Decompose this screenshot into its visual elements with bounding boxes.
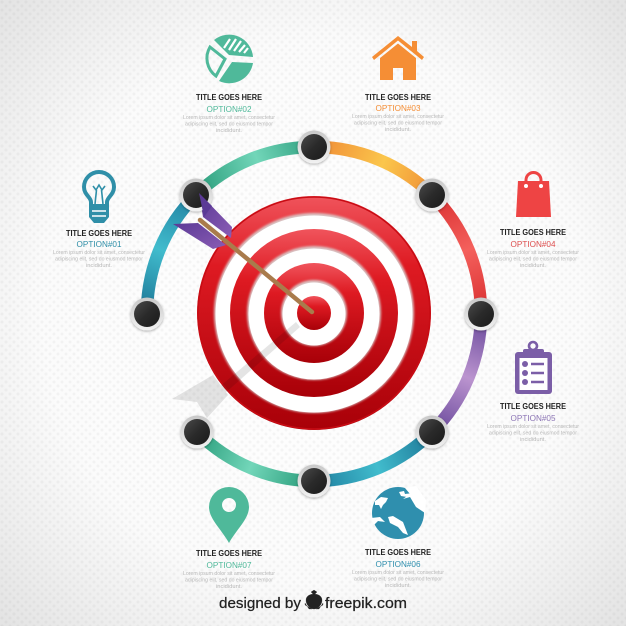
panel: option 01: incididunt. <box>86 263 112 269</box>
panel: option 05: incididunt. <box>520 437 546 443</box>
panel: option 02: OPTION#02 <box>206 104 252 114</box>
arrow shadow <box>172 322 300 418</box>
panel: option 05: Lorem ipsum dolor sit amet, consectetur <box>487 424 579 430</box>
panel: option 05: OPTION#05 <box>510 413 556 423</box>
icon: pie chart <box>207 35 253 83</box>
credit line: freepik.com <box>325 595 407 612</box>
panel: option 01: adipiscing elit, sed do eiusmod tempor <box>55 256 143 262</box>
panel: option 02: incididunt. <box>216 128 242 134</box>
icon: globe <box>371 486 426 539</box>
credit line: designed by <box>219 595 301 612</box>
connector nodes <box>130 130 498 498</box>
panel: option 02: TITLE GOES HERE <box>196 93 263 102</box>
icon: freepik logo <box>305 590 323 609</box>
panel: option 07: Lorem ipsum dolor sit amet, consectetur <box>183 571 275 577</box>
panel: option 04: adipiscing elit, sed do eiusmod tempor <box>489 256 577 262</box>
panel: option 02 <box>183 35 275 134</box>
ring of coloured arc segments <box>147 147 481 481</box>
panel: option 06: incididunt. <box>385 583 411 589</box>
icon: light bulb <box>84 172 114 223</box>
panel: option 04: TITLE GOES HERE <box>500 228 567 237</box>
icon: clipboard <box>515 342 552 394</box>
panel: option 03 <box>352 36 444 133</box>
panel: option 06 <box>352 486 444 589</box>
panel: option 06: Lorem ipsum dolor sit amet, consectetur <box>352 570 444 576</box>
panel: option 05 <box>487 342 579 443</box>
credit line <box>219 590 407 612</box>
panel: option 06: adipiscing elit, sed do eiusmod tempor <box>354 576 442 582</box>
panel: option 07: incididunt. <box>216 584 242 590</box>
panel: option 02: adipiscing elit, sed do eiusmod tempor <box>185 122 273 128</box>
panel: option 04: incididunt. <box>520 263 546 269</box>
panel: option 02: Lorem ipsum dolor sit amet, consectetur <box>183 115 275 121</box>
panel: option 06: TITLE GOES HERE <box>365 548 432 557</box>
panel: option 07: adipiscing elit, sed do eiusmod tempor <box>185 578 273 584</box>
panel: option 01: OPTION#01 <box>76 239 122 249</box>
panel: option 06: OPTION#06 <box>376 559 421 569</box>
panel: option 05: TITLE GOES HERE <box>500 402 567 411</box>
icon: map pin <box>209 487 249 543</box>
panel: option 01: Lorem ipsum dolor sit amet, consectetur <box>53 250 145 256</box>
panel: option 04: OPTION#04 <box>510 239 556 249</box>
panel: option 01: TITLE GOES HERE <box>66 229 133 238</box>
panel: option 03: TITLE GOES HERE <box>365 93 432 102</box>
panel: option 05: adipiscing elit, sed do eiusmod tempor <box>489 430 577 436</box>
panel: option 03: Lorem ipsum dolor sit amet, consectetur <box>352 114 444 120</box>
panel: option 07 <box>183 487 275 590</box>
arrow tip over node <box>199 193 212 217</box>
bullseye target <box>197 196 431 430</box>
panel: option 03: adipiscing elit, sed do eiusmod tempor <box>354 120 442 126</box>
panel: option 04: Lorem ipsum dolor sit amet, consectetur <box>487 250 579 256</box>
panel: option 03: incididunt. <box>385 127 411 133</box>
panel: option 04 <box>487 173 579 269</box>
panel: option 03: OPTION#03 <box>376 103 421 113</box>
icon: house <box>372 36 424 80</box>
icon: shopping bag <box>516 173 551 217</box>
panel: option 07: OPTION#07 <box>206 560 252 570</box>
panel: option 07: TITLE GOES HERE <box>196 549 263 558</box>
panel: option 01 <box>53 172 145 269</box>
arrow <box>173 193 312 312</box>
